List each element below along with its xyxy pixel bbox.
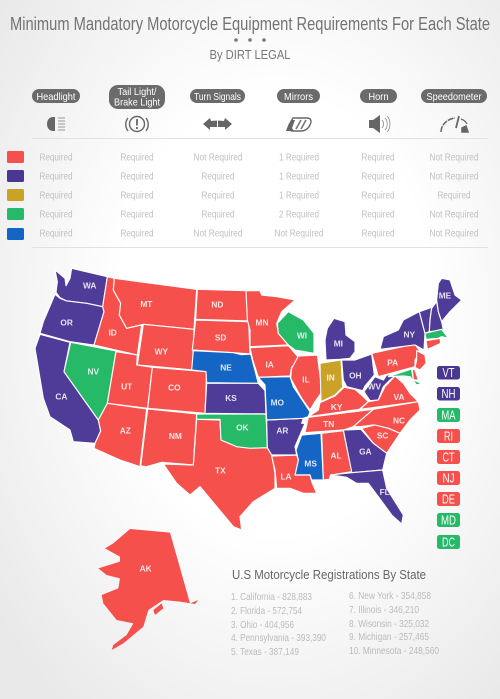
state labels: OK [236, 422, 249, 432]
state labels: NE [220, 362, 232, 372]
state labels: UT [121, 382, 132, 392]
registrations list: left column: 3. Ohio - 404,956 [231, 619, 294, 631]
small state tags: NJ [442, 472, 454, 486]
small state tags: MA [442, 408, 456, 422]
registrations list: left column: 4. Pennsylvania - 393,390 [231, 632, 326, 644]
small state tags: NH [442, 387, 456, 401]
text: MS [304, 459, 317, 469]
registrations list: left column: 2. Florida - 572,754 [231, 605, 302, 617]
requirements table: Required [362, 208, 395, 220]
state labels: AZ [120, 426, 131, 436]
text: AL [330, 450, 342, 460]
registrations heading: U.S Motorcycle Registrations By State [232, 567, 426, 582]
subtitle: By DIRT LEGAL [210, 47, 290, 62]
registrations list: right column [349, 590, 439, 657]
text: IL [302, 374, 310, 384]
small state tags: CT [442, 450, 455, 464]
map: western states [35, 268, 275, 530]
column headers: Tail Light/ [118, 86, 157, 98]
registrations list: right column: 7. Illinois - 346,210 [349, 604, 419, 616]
column headers: Mirrors [284, 91, 313, 103]
icon: speedometer [441, 116, 468, 132]
state labels: WY [155, 346, 168, 356]
text: WI [297, 330, 307, 340]
registrations list: left column: 5. Texas - 387,149 [231, 646, 299, 658]
registrations list: left column: 1. California - 828,883 [231, 591, 312, 603]
requirements table: Required [40, 170, 73, 182]
text: WV [368, 381, 381, 391]
requirements table: Required [438, 190, 471, 202]
text: LA [280, 471, 292, 481]
text: FL [380, 487, 390, 497]
requirements table: Required [40, 152, 73, 164]
registrations list: right column: 10. Minnesota - 248,560 [349, 645, 439, 657]
requirements table: Required [40, 228, 73, 240]
requirements table: Required [40, 190, 73, 202]
small state tags [437, 366, 460, 550]
text: MI [334, 338, 343, 348]
state labels: KS [225, 393, 237, 403]
text: AR [276, 426, 288, 436]
text: NY [404, 330, 416, 340]
column headers: Horn [368, 91, 389, 103]
requirements table: Required [362, 170, 395, 182]
registrations list: left column [231, 591, 326, 658]
requirements table: Not Required [430, 208, 479, 220]
requirements table: Not Required [430, 152, 479, 164]
requirements table: 1 Required [279, 152, 319, 164]
requirements table: Required [202, 208, 235, 220]
requirements table: 1 Required [279, 190, 319, 202]
state labels: NM [169, 431, 182, 441]
state labels: TX [215, 465, 226, 475]
requirements table: Required [120, 152, 154, 164]
small state tags: DC [442, 536, 455, 550]
requirements table: 2 Required [279, 208, 319, 220]
registrations list: right column: 6. New York - 354,858 [349, 590, 431, 602]
text: IA [265, 360, 274, 370]
text: OH [349, 370, 362, 380]
registrations list: right column: 9. Michigan - 257,465 [349, 631, 429, 643]
small state tags: VT [442, 366, 455, 380]
state labels: CO [168, 383, 181, 393]
requirements table: Required [120, 228, 154, 240]
icon: headlight [47, 117, 65, 131]
state labels: ID [108, 328, 117, 338]
small state tags: DE [442, 492, 455, 506]
state labels: OR [60, 318, 73, 328]
legend swatches [7, 151, 24, 240]
requirements table: Not Required [430, 170, 479, 182]
requirements table: Required [202, 170, 235, 182]
label: AK: AK [140, 563, 152, 573]
text: KY [331, 402, 343, 412]
map: Alaska [98, 529, 198, 650]
requirements table [40, 152, 479, 240]
icon: mirror [286, 118, 311, 131]
text: MO [271, 398, 285, 408]
requirements table: Required [362, 152, 395, 164]
column headers: Speedometer [426, 91, 482, 103]
text: GA [359, 447, 372, 457]
small state tags: RI [444, 430, 453, 444]
table divider top [32, 138, 488, 139]
state labels: SD [215, 332, 226, 342]
text: MN [256, 317, 268, 327]
state labels: MT [140, 299, 152, 309]
column headers: Turn Signals [194, 91, 241, 103]
text: NC [393, 415, 405, 425]
map: eastern states [246, 278, 462, 524]
state labels: WA [83, 281, 96, 291]
text: IN [326, 373, 335, 383]
column headers: Headlight [36, 91, 76, 103]
requirements table: Not Required [194, 152, 243, 164]
requirements table: Required [362, 190, 395, 202]
state labels: CA [55, 391, 67, 401]
column headers [32, 85, 487, 109]
small state tags: MD [441, 514, 456, 528]
text: PA [387, 358, 398, 368]
requirements table: Required [40, 208, 73, 220]
icon: brake light [126, 116, 148, 132]
requirements table: Not Required [194, 228, 243, 240]
text: ME [439, 291, 452, 301]
requirements table: 1 Required [279, 170, 319, 182]
text: VA [394, 392, 404, 402]
state labels [55, 281, 249, 475]
text: TN [323, 419, 334, 429]
requirements table: Required [120, 190, 154, 202]
requirements table: Not Required [274, 228, 324, 240]
requirements table: Required [120, 170, 154, 182]
text: SC [377, 430, 388, 440]
title dots [234, 38, 266, 42]
table divider bottom [32, 247, 488, 248]
requirements table: Required [362, 228, 395, 240]
requirements table: Required [120, 208, 154, 220]
state labels: NV [88, 367, 100, 377]
state labels: ND [211, 300, 223, 310]
column headers: Brake Light [114, 96, 160, 108]
icon: turn signals [203, 118, 232, 130]
registrations list: right column: 8. Wisonsin - 325,032 [349, 618, 429, 630]
requirements table: Required [202, 190, 235, 202]
requirements table: Not Required [430, 228, 479, 240]
icon: horn [369, 115, 390, 133]
